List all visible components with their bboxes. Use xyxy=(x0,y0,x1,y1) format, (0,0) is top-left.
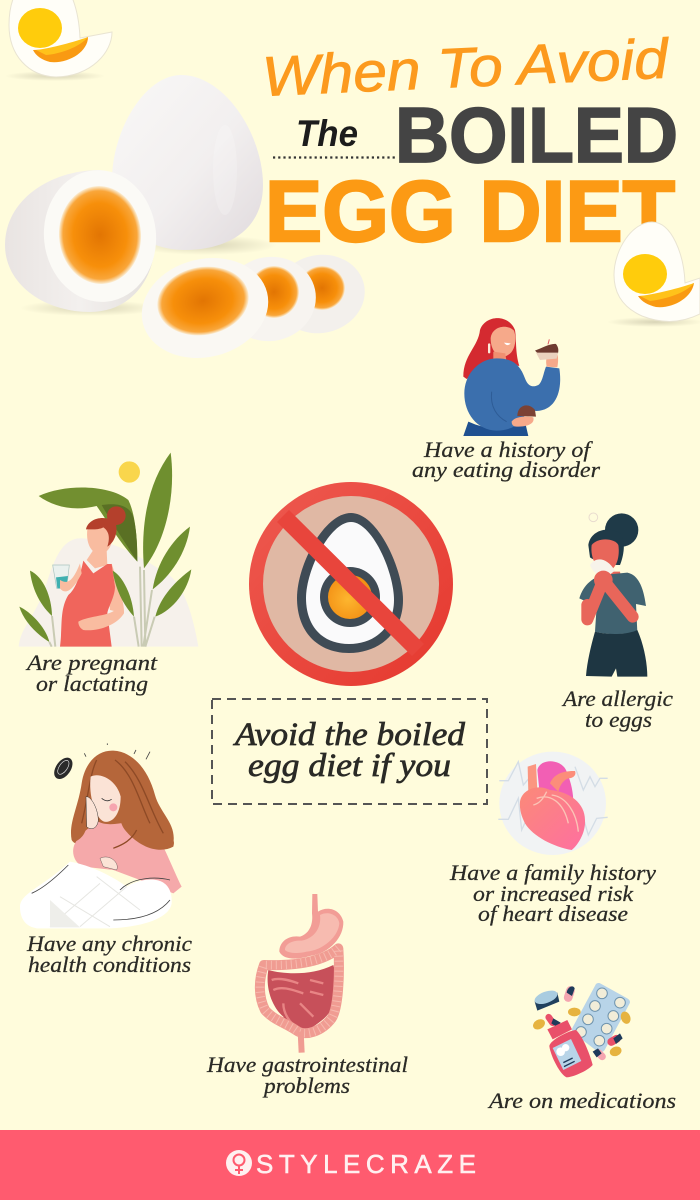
panel: eating disorder xyxy=(412,318,600,482)
label: to eggs xyxy=(585,707,652,732)
title word: The with dotted leader: The xyxy=(296,113,358,154)
illustration: pregnant woman with plants xyxy=(19,453,198,647)
label: any eating disorder xyxy=(412,457,600,482)
panel: heart disease xyxy=(449,752,656,926)
label: of heart disease xyxy=(478,901,628,926)
label: Are allergic xyxy=(561,686,673,711)
callout: avoid the boiled egg diet if you xyxy=(212,699,487,804)
label: Have a history of xyxy=(423,437,593,462)
small intestine xyxy=(268,965,336,1033)
icon: no eggs prohibition sign xyxy=(249,482,453,686)
label xyxy=(561,686,673,732)
right arm xyxy=(107,563,124,613)
icon: cut egg top-left xyxy=(5,0,112,81)
label xyxy=(26,931,192,977)
egg slice back xyxy=(268,246,372,342)
icon: boiled eggs group xyxy=(5,75,372,371)
label: Have any chronic xyxy=(26,931,192,956)
title xyxy=(261,27,678,260)
title word: The with dotted leader xyxy=(273,113,395,158)
label: Have a family history xyxy=(449,860,656,885)
illustration: digestive system xyxy=(260,894,343,1053)
icon: logo xyxy=(226,1150,252,1176)
label: or lactating xyxy=(36,671,148,696)
illustration: heart xyxy=(498,752,608,855)
label: Have gastrointestinal xyxy=(206,1052,408,1077)
illustration: woman eating cake xyxy=(463,318,560,436)
title word: BOILED: BOILED xyxy=(395,91,678,179)
panel: medications xyxy=(487,983,676,1113)
illustration: pills and bottle xyxy=(531,983,632,1077)
illustration: woman sneezing xyxy=(579,513,647,677)
panel: allergic to eggs xyxy=(561,513,673,732)
illustration: tired woman in blanket xyxy=(20,743,182,928)
panel: gastrointestinal problems xyxy=(206,894,408,1098)
label xyxy=(412,437,600,482)
egg slice front xyxy=(131,245,279,371)
callout: avoid the boiled egg diet if you: egg diet if you xyxy=(248,748,451,784)
prohibition bar xyxy=(283,516,418,650)
label: or increased risk xyxy=(473,881,634,906)
colon xyxy=(260,948,339,1033)
label: Are pregnant xyxy=(25,650,158,675)
whole egg xyxy=(112,75,277,255)
title line: When To Avoid: When To Avoid xyxy=(261,27,671,108)
brand name: STYLECRAZE xyxy=(256,1149,476,1179)
label: health conditions xyxy=(28,952,191,977)
title line: EGG DIET: EGG DIET xyxy=(265,164,675,260)
halved egg xyxy=(5,165,163,316)
label xyxy=(449,860,656,926)
panel: chronic health conditions xyxy=(20,743,192,977)
egg in sign xyxy=(297,513,403,653)
callout: avoid the boiled egg diet if you: Avoid the boiled xyxy=(233,717,466,753)
icon: cut egg right xyxy=(607,222,700,327)
panel: pregnant or lactating xyxy=(19,453,198,696)
label xyxy=(25,650,158,696)
label: Are on medications xyxy=(487,1088,676,1113)
footer brand bar xyxy=(0,1130,700,1200)
label: problems xyxy=(262,1073,350,1098)
label xyxy=(206,1052,408,1098)
egg slice middle xyxy=(216,248,324,350)
